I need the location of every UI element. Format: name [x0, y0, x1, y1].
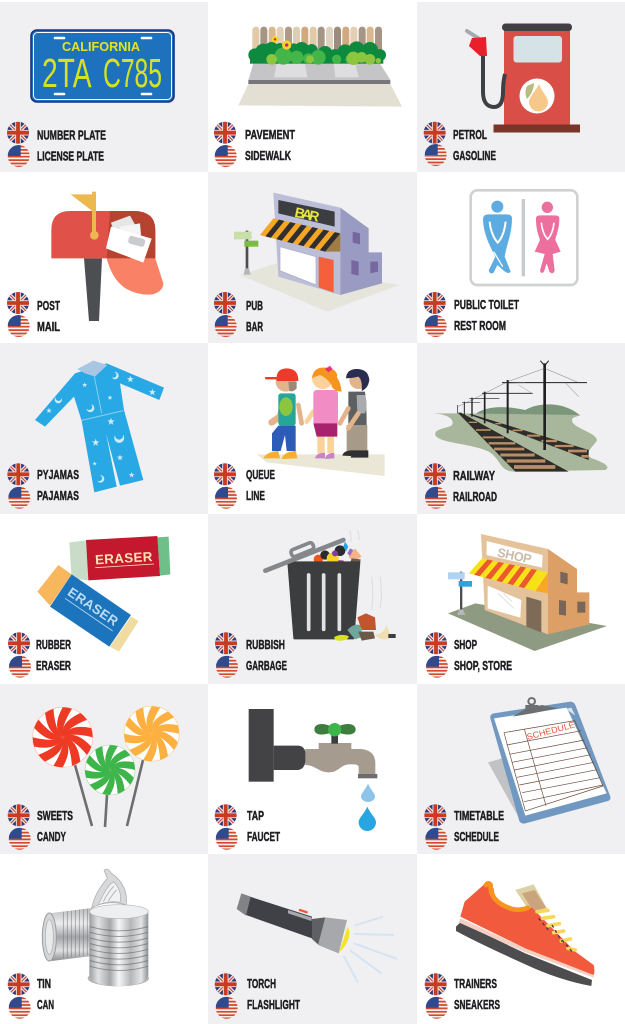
icon: UK flag: [8, 632, 30, 654]
icon: UK flag: [7, 122, 29, 144]
icon: US flag: [8, 145, 30, 167]
panel: queue / line: [214, 366, 385, 509]
icon: US flag: [216, 656, 238, 678]
label: tap: TAP: [247, 808, 264, 823]
panel: rubbish / garbage: [208, 514, 417, 684]
icon: US flag: [425, 315, 447, 337]
label: rubbish: RUBBISH: [246, 637, 285, 652]
label: public toilet: PUBLIC TOILET: [454, 297, 519, 312]
icon: shop building: SHOP: [496, 546, 533, 567]
icon: petrol pump: [467, 24, 580, 132]
panel: sweets / candy: [0, 684, 208, 854]
icon: two erasers: ERASER: [65, 584, 121, 629]
icon: UK flag: [424, 292, 446, 314]
panel: pub / bar: [208, 172, 417, 343]
icon: US flag: [216, 997, 238, 1019]
label: line: LINE: [246, 488, 265, 503]
icon: bar building: BAR: [293, 204, 321, 225]
icon: US flag: [425, 144, 447, 166]
panel: public toilet / rest room: [424, 190, 577, 337]
panel: post / mail: [7, 192, 163, 337]
icon: US flag: [215, 487, 237, 509]
label: post: POST: [37, 298, 60, 313]
panel: rubber / eraser: [8, 536, 170, 678]
panel: trainers / sneakers: [425, 883, 594, 1019]
label: pavement: PAVEMENT: [245, 127, 295, 142]
label: rubber: RUBBER: [36, 637, 71, 652]
icon: shop building: [448, 534, 607, 651]
panel: pavement / sidewalk: [214, 27, 402, 167]
panel: railway / railroad: [417, 343, 625, 514]
icon: UK flag: [214, 292, 236, 314]
icon: red trainer: [456, 883, 594, 986]
icon: two erasers: ERASER: [95, 549, 153, 567]
label: queue: QUEUE: [246, 467, 275, 482]
icon: US flag: [216, 828, 238, 850]
panel: torch / flashlight: [208, 854, 417, 1024]
icon: US flag: [425, 828, 447, 850]
icon: US flag: [9, 656, 31, 678]
icon: california number plate: C785: [103, 50, 162, 96]
icon: UK flag: [215, 804, 237, 826]
label: rest room: REST ROOM: [454, 318, 506, 333]
icon: clipboard schedule: [488, 698, 610, 824]
icon: UK flag: [214, 463, 236, 485]
icon: US flag: [8, 487, 30, 509]
icon: UK flag: [215, 632, 237, 654]
label: railroad: RAILROAD: [453, 489, 497, 504]
icon: three people queuing: [257, 366, 385, 476]
label: license plate: LICENSE PLATE: [37, 148, 104, 164]
label: sidewalk: SIDEWALK: [245, 148, 291, 163]
label: pyjamas: PYJAMAS: [37, 467, 79, 482]
icon: UK flag: [424, 463, 446, 485]
icon: US flag: [8, 315, 30, 337]
label: flashlight: FLASHLIGHT: [247, 997, 300, 1012]
label: trainers: TRAINERS: [454, 976, 497, 991]
icon: toilet sign: [471, 190, 577, 285]
icon: UK flag: [425, 973, 447, 995]
icon: california number plate: 2TA: [42, 50, 92, 96]
icon: US flag: [9, 828, 31, 850]
label: pub: PUB: [246, 298, 263, 313]
label: bar: BAR: [246, 319, 263, 334]
icon: bar building: [234, 193, 399, 312]
label: sweets: SWEETS: [37, 808, 73, 823]
panel: shop / store: [425, 534, 607, 678]
panel: tap / faucet: [215, 709, 377, 850]
icon: US flag: [9, 997, 31, 1019]
label: faucet: FAUCET: [247, 829, 280, 844]
icon: california number plate: [31, 30, 174, 102]
icon: UK flag: [424, 804, 446, 826]
label: timetable: TIMETABLE: [454, 808, 504, 823]
panel: pyjamas / pajamas: [0, 343, 208, 514]
icon: UK flag: [7, 292, 29, 314]
label: candy: CANDY: [37, 829, 66, 844]
label: railway: RAILWAY: [453, 468, 495, 483]
icon: UK flag: [424, 122, 446, 144]
label: mail: MAIL: [37, 319, 60, 334]
icon: UK flag: [8, 973, 30, 995]
label: garbage: GARBAGE: [246, 658, 287, 673]
panel: number plate / license plate: [0, 2, 208, 172]
label: eraser: ERASER: [36, 658, 71, 673]
icon: two tin cans: [42, 869, 149, 986]
label: shop, store: SHOP, STORE: [454, 658, 512, 673]
label: schedule: SCHEDULE: [454, 829, 499, 844]
label: shop: SHOP: [454, 637, 477, 652]
panel: petrol / gasoline: [417, 2, 625, 172]
label: pajamas: PAJAMAS: [37, 488, 79, 503]
label: gasoline: GASOLINE: [453, 148, 496, 163]
label: number plate: NUMBER PLATE: [37, 128, 106, 142]
label: can: CAN: [37, 997, 54, 1012]
label: torch: TORCH: [247, 976, 276, 991]
icon: california number plate: CALIFORNIA: [62, 39, 141, 54]
icon: UK flag: [8, 804, 30, 826]
label: petrol: PETROL: [453, 127, 487, 142]
icon: UK flag: [7, 463, 29, 485]
icon: US flag: [426, 656, 448, 678]
icon: railway with overhead wires: [430, 361, 607, 472]
icon: US flag: [426, 997, 448, 1019]
icon: pyjamas: [35, 361, 164, 492]
icon: UK flag: [215, 973, 237, 995]
icon: UK flag: [214, 122, 236, 144]
panel: tin / can: [8, 869, 149, 1019]
icon: torch with light rays: [237, 893, 397, 983]
icon: two erasers: [37, 536, 170, 652]
label: sneakers: SNEAKERS: [454, 997, 500, 1012]
icon: pavement with fence and shrubs: [238, 27, 402, 107]
icon: three lollipops: [31, 706, 180, 827]
panel: timetable / schedule: [417, 684, 625, 854]
icon: dripping tap: [249, 709, 377, 831]
icon: US flag: [215, 315, 237, 337]
icon: US flag: [425, 487, 447, 509]
icon: rubbish bin: [265, 530, 396, 641]
icon: UK flag: [425, 632, 447, 654]
icon: clipboard schedule: SCHEDULE: [526, 719, 576, 742]
label: tin: TIN: [37, 976, 51, 991]
icon: mailbox: [51, 192, 163, 321]
icon: US flag: [215, 145, 237, 167]
